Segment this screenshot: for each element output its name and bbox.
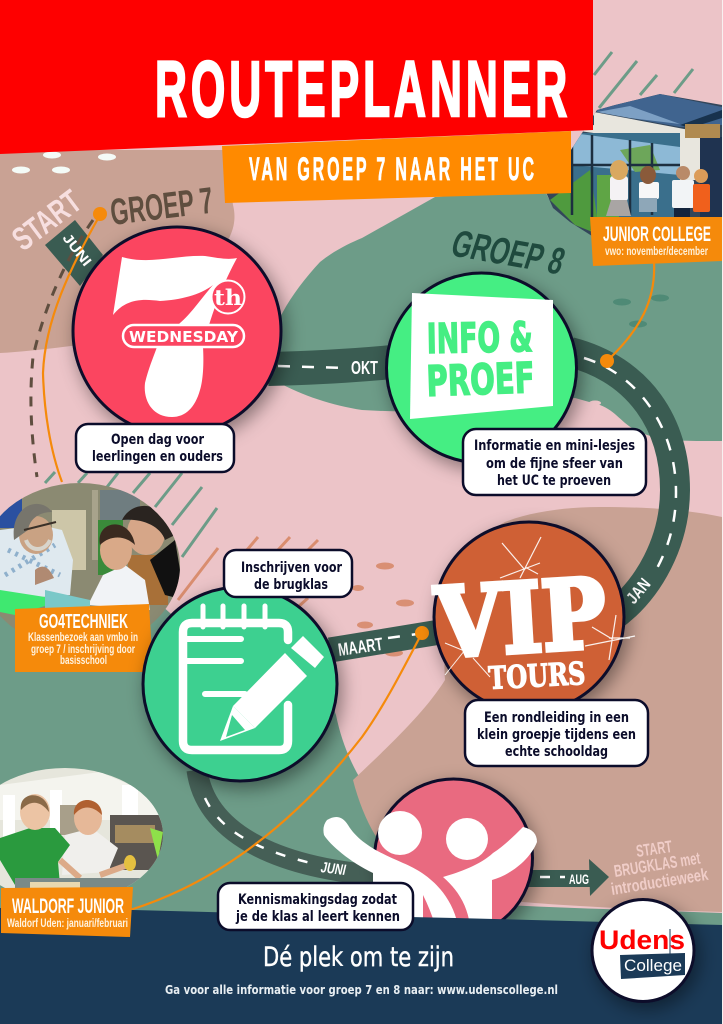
- month: aug: AUG: [569, 871, 589, 887]
- subtitle banner: [222, 131, 571, 203]
- icon: two cheering figures: [323, 811, 537, 925]
- subtitle banner: VAN GROEP 7 NAAR HET UC: [249, 152, 534, 188]
- label: go4techniek: Klassenbezoek aan vmbo in: [28, 630, 138, 644]
- hatch lines: [45, 52, 693, 607]
- label: waldorf junior: WALDORF JUNIOR: [12, 895, 124, 918]
- road: groep 7 to groep 8: [268, 362, 392, 369]
- decorative dots: [12, 152, 669, 656]
- footer info: Ga voor alle informatie voor groep 7 en 8 naar: www.udenscollege.nl: [165, 982, 558, 997]
- right edge strip: [722, 0, 723, 1024]
- callout: kennismakingsdag: Kennismakingsdag zodat: [238, 892, 397, 908]
- groep 7 heading: GROEP 7: [108, 180, 215, 233]
- circle: inschrijven: [143, 587, 337, 781]
- circle: info en proef: [386, 273, 576, 463]
- callout: inschrijven: Inschrijven voor: [241, 560, 342, 576]
- start text: START: [5, 182, 88, 258]
- icon: th badge: th: [214, 285, 242, 310]
- label: go4techniek: basisschool: [60, 653, 107, 667]
- sparkles: [445, 537, 635, 677]
- icon: th badge: [212, 280, 244, 314]
- callout: kennismakingsdag: je de klas al leert kennen: [235, 909, 400, 925]
- logo: udens college: College: [624, 956, 682, 975]
- month: maart: MAART: [337, 634, 384, 660]
- background shapes: [0, 150, 722, 930]
- photo: junior college building: [540, 90, 723, 240]
- wednesday pill: WEDNESDAY: [129, 328, 239, 346]
- circle: kennismaking: [374, 779, 532, 937]
- label: go4techniek: GO4TECHNIEK: [39, 611, 128, 633]
- circle: info en proef: INFO &: [426, 313, 533, 363]
- logo: udens college: [592, 900, 694, 1002]
- callout: rondleiding: Een rondleiding in een: [484, 710, 629, 726]
- icon: big seven: [113, 256, 237, 417]
- callout: rondleiding: klein groepje tijdens een: [477, 727, 636, 743]
- circle: info en proef: PROEF: [426, 353, 535, 406]
- callout: kennismakingsdag: [218, 883, 413, 930]
- label: waldorf junior: Waldorf Uden: januari/februari: [7, 916, 128, 930]
- footer slogan: Dé plek om te zijn: [263, 942, 454, 973]
- photo: waldorf junior: [0, 768, 163, 888]
- month: okt: OKT: [351, 358, 378, 378]
- callout: rondleiding: [465, 700, 648, 766]
- footer band: [0, 908, 723, 1024]
- orange connector: waldorf junior: [130, 626, 429, 910]
- callout: open dag: Open dag voor: [111, 432, 204, 448]
- label: junior college: [590, 217, 722, 266]
- circle: vip tours: VIP: [432, 557, 609, 680]
- start brugklas text: [610, 837, 710, 899]
- dashed start line: [31, 220, 93, 477]
- label: go4techniek: groep 7 / inschrijving door: [31, 642, 135, 656]
- circle: vip tours: [432, 522, 635, 712]
- label: go4techniek: [15, 604, 153, 672]
- month: juni: JUNI: [319, 859, 348, 879]
- road: juni start: [45, 220, 103, 286]
- callout: rondleiding: echte schooldag: [505, 744, 608, 760]
- juni label: JUNI: [60, 230, 95, 269]
- title: ROUTEPLANNER: [155, 44, 567, 133]
- callout: open dag: [76, 424, 234, 472]
- callout: informatie: Informatie en mini-lesjes: [474, 438, 635, 454]
- callout: open dag: leerlingen en ouders: [92, 449, 223, 465]
- callout: inschrijven: [224, 550, 352, 597]
- orange connector: go4techniek: [43, 207, 107, 482]
- callout: informatie: het UC te proeven: [497, 473, 611, 489]
- month: jan: JAN: [623, 575, 654, 608]
- photo: go4techniek: [0, 483, 180, 629]
- callout: inschrijven: de brugklas: [254, 577, 328, 593]
- header: red banner: [0, 0, 593, 154]
- label: waldorf junior: [1, 887, 133, 937]
- start brugklas text: START: [635, 837, 674, 861]
- callout: informatie: om de fijne sfeer van: [486, 456, 623, 472]
- groep 8 heading: GROEP 8: [446, 223, 570, 283]
- circle: vip tours: TOURS: [488, 656, 586, 697]
- logo: udens college: Udens: [599, 925, 685, 955]
- circle: 7th wednesday: [73, 227, 281, 435]
- icon: pencil: [220, 636, 324, 741]
- road: VIP to inschrijven: [330, 632, 440, 650]
- road: inschrijven to kennismaking: [197, 770, 385, 876]
- road: kennismaking to arrow: [525, 859, 609, 896]
- orange connector: junior college: [600, 262, 654, 368]
- icon: notepad: [183, 606, 288, 750]
- road: groep 8 to VIP: [570, 352, 676, 618]
- callout: informatie: [463, 429, 646, 495]
